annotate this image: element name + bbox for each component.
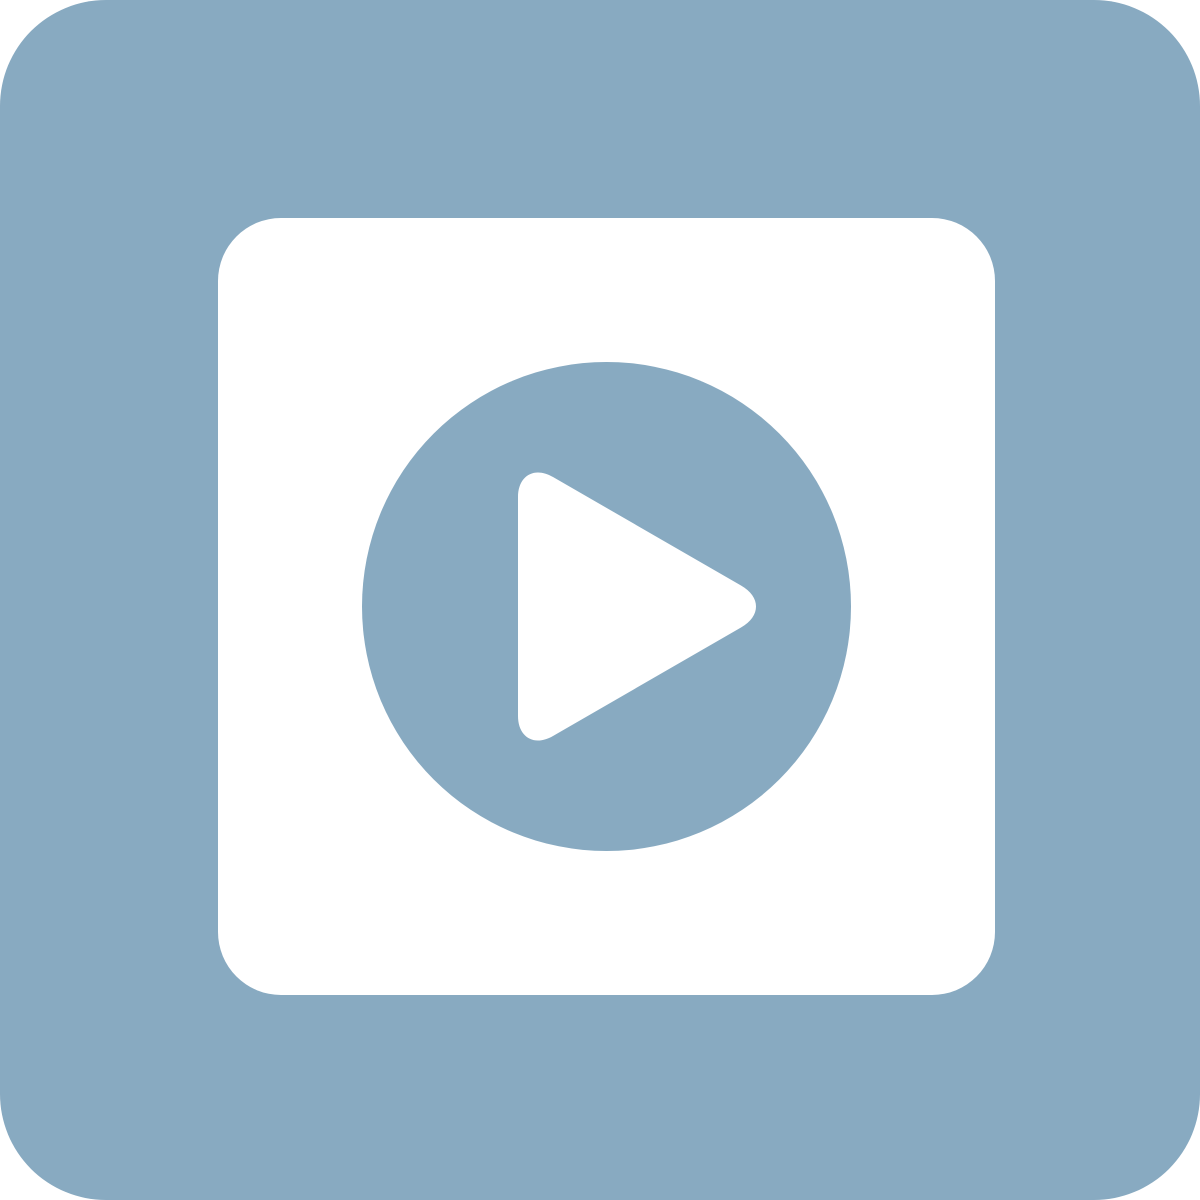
panel: white video screen	[218, 218, 995, 995]
icon: play triangle	[518, 472, 756, 741]
icon: play circle	[362, 362, 851, 851]
